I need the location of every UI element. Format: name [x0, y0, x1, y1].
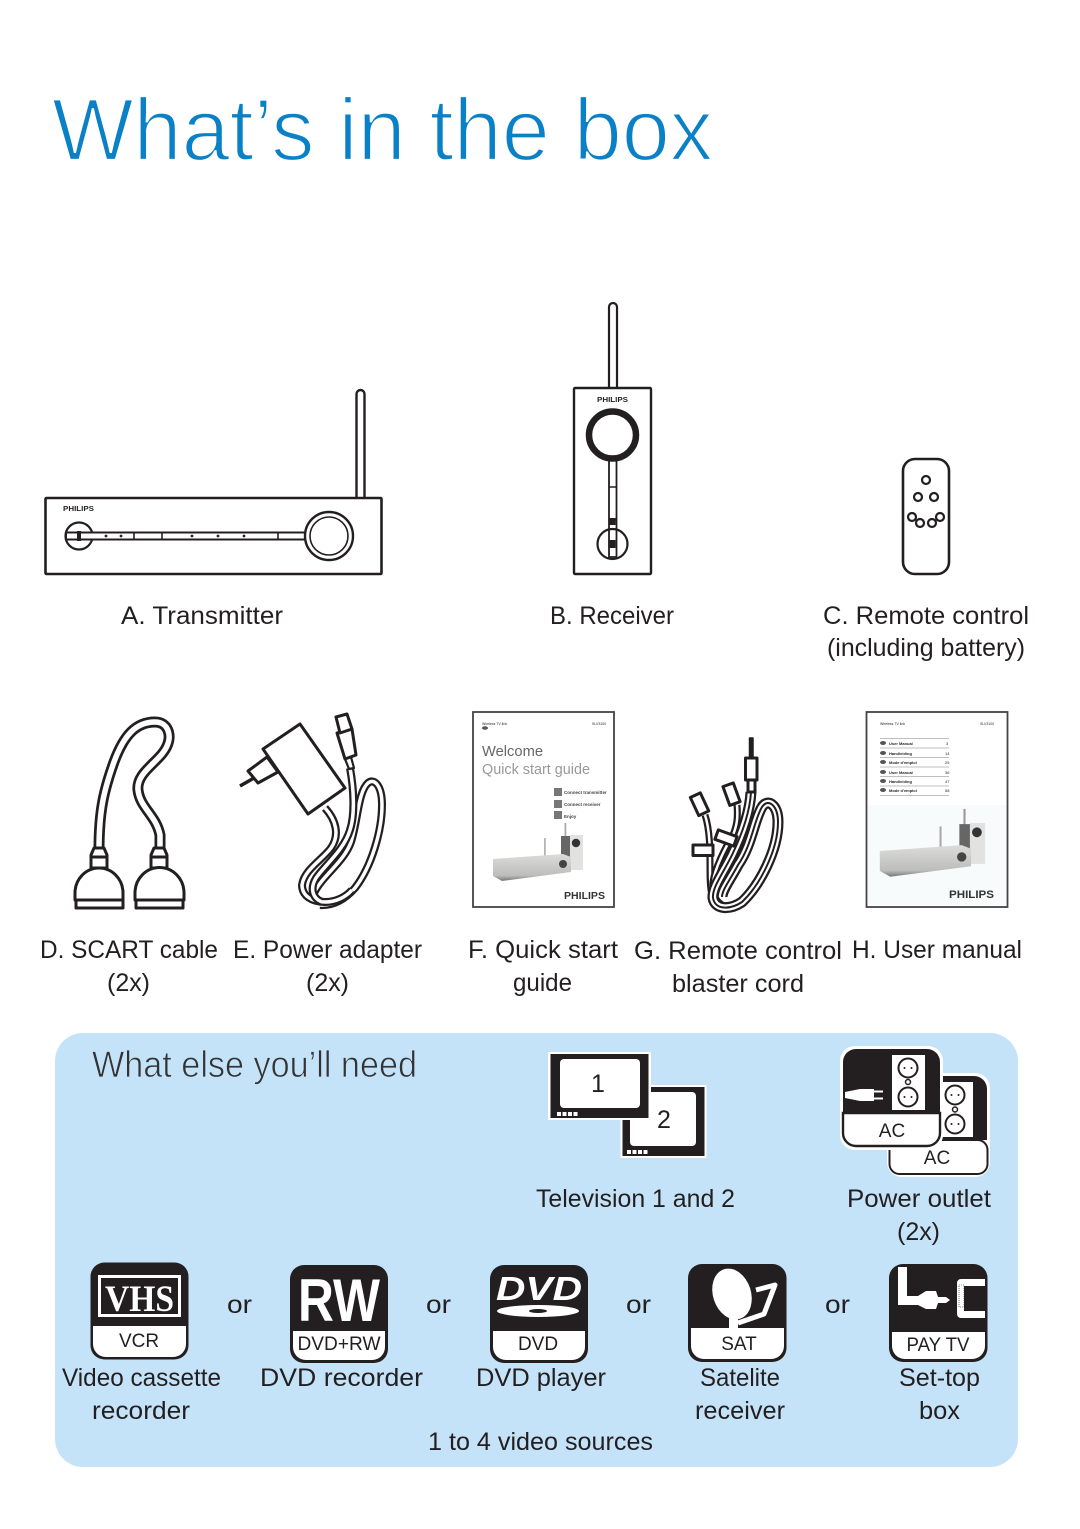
icon: transmitter body [46, 498, 382, 574]
icon: power outlet back: AC [924, 1148, 950, 1169]
label: or 1: or [227, 1291, 252, 1319]
panel heading: What else you’ll need [92, 1044, 417, 1085]
booklet brand: PHILIPS [564, 891, 605, 902]
icon: SCART cord [99, 722, 169, 850]
label: DVD recorder: DVD recorder [260, 1364, 423, 1392]
icon: adapter connector [336, 714, 356, 769]
label: DVD player: DVD player [476, 1364, 606, 1392]
label B: B. Receiver [550, 602, 674, 630]
label: satellite receiver: Satelite [700, 1364, 780, 1392]
label C [823, 602, 1029, 662]
icon: satellite [688, 1263, 786, 1362]
icon: television 1 [548, 1052, 651, 1120]
icon: pay TV: PAY TV [906, 1335, 970, 1356]
manual contents list: 25 [945, 760, 950, 765]
product A: transmitter [46, 390, 382, 574]
product E: power adapter [240, 714, 382, 905]
manual brand: PHILIPS [949, 889, 994, 901]
icon: television 1: 1 [591, 1070, 605, 1098]
manual contents list: Handleiding [889, 779, 912, 784]
icon: transmitter antenna [356, 390, 364, 498]
manual contents list: 47 [945, 779, 950, 784]
manual contents list: Handleiding [889, 751, 912, 756]
label H: H. User manual [852, 936, 1022, 964]
icon: VCR: VHS [105, 1279, 174, 1320]
label: video sources: 1 to 4 video sources [428, 1428, 653, 1456]
logo: Philips on transmitter: PHILIPS [63, 504, 94, 513]
product B: receiver [574, 303, 651, 574]
icon: VCR: VCR [119, 1331, 159, 1352]
manual contents list: 58 [945, 788, 950, 793]
product D: SCART cable [75, 722, 184, 908]
booklet steps: Connect transmitter [564, 790, 607, 795]
booklet header: Wireless TV link [482, 722, 507, 726]
label: or 4: or [825, 1291, 850, 1319]
icon: SCART plug right [135, 848, 184, 908]
icon: adapter cord [302, 768, 382, 905]
product F: quick start guide [473, 712, 614, 907]
label F: guide [513, 969, 572, 997]
label: or 2: or [426, 1291, 451, 1319]
icon: DVD+RW: DVD+RW [298, 1334, 381, 1355]
icon: power outlet back [887, 1073, 990, 1177]
manual header: Wireless TV link [880, 722, 905, 726]
icon: receiver dial and controls [589, 412, 636, 559]
panel: what else you'll need [55, 1033, 1018, 1467]
label: set-top box: box [919, 1397, 961, 1425]
label: video cassette recorder [62, 1364, 221, 1425]
manual contents list: Mode d'emploi [889, 788, 917, 793]
icon: blaster cord bundle [705, 792, 778, 908]
label: television: Television 1 and 2 [536, 1185, 735, 1213]
icon: SCART plug left [75, 848, 123, 908]
icon: DVD+RW [290, 1265, 388, 1363]
icon: television 2 [620, 1085, 706, 1158]
label G: G. Remote control [634, 937, 842, 965]
product F: quick start guide: Quick start guide [482, 761, 590, 778]
icon: receiver antenna [609, 303, 617, 388]
label A: A. Transmitter [121, 602, 283, 630]
manual contents list: 36 [945, 770, 950, 775]
label G [634, 937, 842, 998]
label: video cassette recorder: Video cassette [62, 1364, 221, 1392]
icon: power outlet front [840, 1046, 943, 1150]
booklet steps [554, 788, 607, 819]
booklet steps: Enjoy [564, 814, 577, 819]
label F: F. Quick start [468, 936, 618, 964]
label E: (2x) [306, 969, 349, 997]
product H: user manual [866, 712, 1008, 907]
product H: user manual: SLV3100 [980, 722, 994, 726]
label: set-top box [899, 1364, 980, 1425]
icon: television 2: 2 [657, 1106, 671, 1134]
label D: (2x) [107, 969, 150, 997]
booklet steps: Connect receiver [564, 802, 601, 807]
booklet title: Welcome [482, 743, 543, 760]
label C: C. Remote control [823, 602, 1029, 630]
logo: Philips on receiver: PHILIPS [597, 395, 628, 404]
manual contents list: 14 [945, 751, 950, 756]
booklet product photo [493, 823, 583, 881]
label: power outlet: Power outlet [847, 1185, 991, 1213]
label D [40, 936, 218, 997]
icon: DVD: DVD [496, 1270, 582, 1307]
product C: remote control [903, 459, 949, 574]
label: satellite receiver [695, 1364, 785, 1425]
product G: remote control blaster cord [690, 738, 778, 908]
icon: transmitter controls [66, 512, 353, 560]
label: power outlet: (2x) [897, 1218, 940, 1246]
manual contents list [880, 738, 950, 796]
title: What’s in the box [52, 80, 713, 179]
label E [233, 936, 422, 997]
product F: quick start guide: SLV3100 [592, 722, 606, 726]
label C: (including battery) [827, 634, 1025, 662]
icon: adapter body and plug [240, 724, 345, 814]
manual contents list: User Manual [889, 770, 913, 775]
label F [468, 936, 618, 997]
icon: power outlet front: AC [879, 1121, 905, 1142]
manual contents list: 3 [946, 741, 949, 746]
label D: D. SCART cable [40, 936, 218, 964]
icon: blaster emitters [690, 783, 740, 856]
manual contents list: Mode d'emploi [889, 760, 917, 765]
label G: blaster cord [672, 970, 804, 998]
label: or 3: or [626, 1291, 651, 1319]
icon: satellite: SAT [721, 1334, 757, 1355]
label: power outlet [847, 1185, 991, 1246]
manual product photo [868, 805, 1006, 905]
icon: pay TV [889, 1264, 988, 1362]
label: set-top box: Set-top [899, 1364, 980, 1392]
icon: blaster jack [746, 738, 757, 792]
icon: receiver body [574, 388, 651, 574]
icon: DVD [490, 1265, 588, 1363]
icon: DVD+RW: RW [298, 1267, 380, 1334]
label: video cassette recorder: recorder [92, 1397, 190, 1425]
manual contents list: User Manual [889, 741, 913, 746]
icon: DVD: DVD [518, 1334, 558, 1355]
icon: VCR [90, 1262, 188, 1360]
label: satellite receiver: receiver [695, 1397, 785, 1425]
label E: E. Power adapter [233, 936, 422, 964]
